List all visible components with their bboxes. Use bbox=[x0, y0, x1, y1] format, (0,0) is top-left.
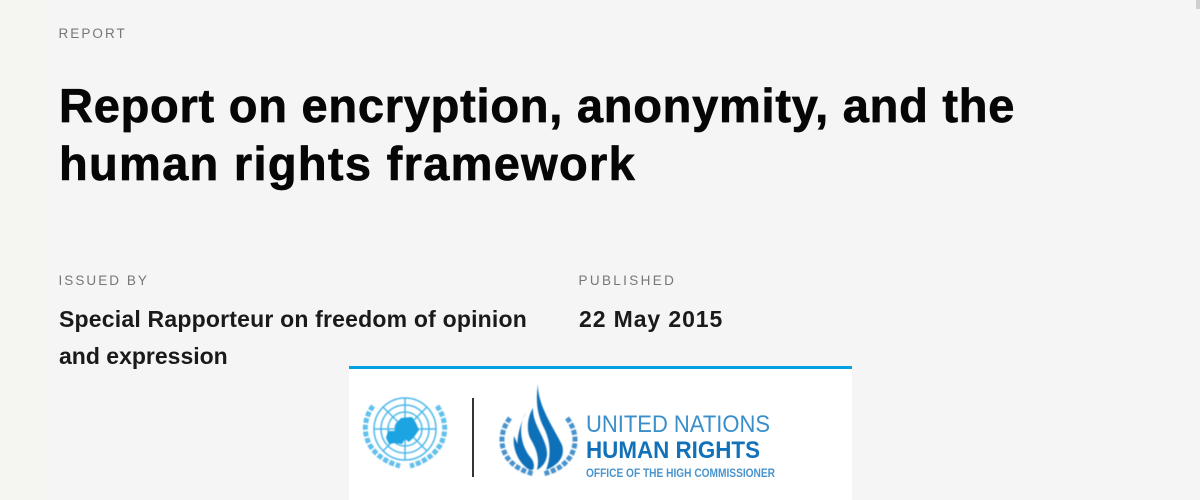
issued by value: Special Rapporteur on freedom of opinion bbox=[59, 306, 527, 332]
logo artwork bbox=[362, 384, 776, 480]
published date: 22 May 2015 bbox=[579, 306, 723, 332]
issued by value bbox=[59, 306, 527, 369]
title bbox=[59, 79, 1015, 190]
report label: REPORT bbox=[58, 26, 127, 41]
issued by label: ISSUED BY bbox=[58, 273, 149, 288]
title: human rights framework bbox=[59, 137, 636, 190]
icon: human rights flame bbox=[502, 384, 575, 474]
issued by value: and expression bbox=[59, 343, 228, 369]
divider bbox=[472, 398, 474, 477]
logo text: Office of the High Commissioner: OFFICE OF THE HIGH COMMISSIONER bbox=[586, 468, 776, 480]
logo text: United Nations: UNITED NATIONS bbox=[586, 411, 770, 438]
logo top rule bbox=[349, 366, 852, 369]
logo text: Human Rights: HUMAN RIGHTS bbox=[586, 437, 760, 464]
scrollbar thumb bbox=[1196, 0, 1200, 9]
icon: UN emblem bbox=[365, 398, 445, 466]
title: Report on encryption, anonymity, and the bbox=[59, 79, 1015, 132]
published label: PUBLISHED bbox=[578, 273, 676, 288]
logo panel bbox=[349, 366, 852, 500]
